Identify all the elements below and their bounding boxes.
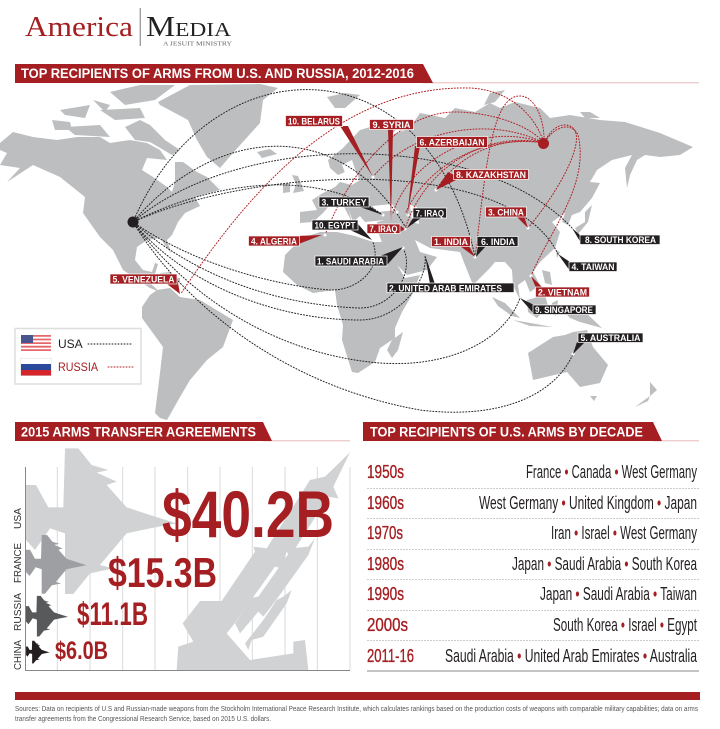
heading: top recipients map: TOP RECIPIENTS OF ARMS FROM U.S. AND RUSSIA, 2012-2016 bbox=[21, 66, 414, 81]
label: 10. Egypt bbox=[312, 220, 372, 240]
label: 2. United Arab Emirates bbox=[387, 255, 514, 294]
label: 6. Azerbaijan: 6. AZERBAIJAN bbox=[420, 138, 485, 148]
chart axis bbox=[26, 467, 350, 670]
heading: top recipients by decade bbox=[363, 422, 699, 441]
label: 6. India (USA): 6. INDIA bbox=[481, 237, 515, 248]
label: 7. Iraq (Russia): 7. IRAQ bbox=[370, 224, 398, 235]
label: 4. Algeria: 4. ALGERIA bbox=[251, 236, 297, 248]
sources text bbox=[15, 706, 698, 723]
origin dot: USA bbox=[128, 216, 138, 228]
row: 1990s: 1990s bbox=[367, 584, 404, 604]
label: 3. China bbox=[486, 207, 528, 228]
label: 3. Turkey: 3. TURKEY bbox=[322, 198, 367, 208]
jet: USA bbox=[26, 448, 177, 594]
label: 6. India (USA) bbox=[476, 236, 518, 257]
heading: top recipients map bbox=[15, 64, 699, 83]
chart: 2015 arms transfers bbox=[13, 448, 350, 670]
map: Indonesia bbox=[492, 295, 602, 328]
label: 1. India (Russia) bbox=[432, 236, 475, 257]
row: 1980s: 1980s bbox=[367, 554, 404, 574]
map: inland seas bbox=[342, 160, 419, 224]
label: 4. Taiwan: 4. TAIWAN bbox=[572, 262, 615, 273]
Russia arcs bbox=[180, 88, 580, 295]
world map bbox=[0, 84, 693, 420]
label: 7. Iraq (USA): 7. IRAQ bbox=[416, 208, 444, 220]
row: 1950s: 1950s bbox=[367, 462, 404, 482]
heading: 2015 arms transfer agreements bbox=[15, 422, 350, 441]
map: Eurasia bbox=[300, 102, 693, 300]
axis label: France: FRANCE bbox=[13, 543, 24, 583]
label: 4. Taiwan bbox=[558, 254, 617, 273]
map: Arctic and Pacific islands bbox=[327, 90, 600, 285]
heading: top recipients by decade: TOP RECIPIENTS OF U.S. ARMS BY DECADE bbox=[370, 424, 643, 440]
label: 5. Australia: 5. AUSTRALIA bbox=[580, 333, 641, 344]
row: 2000s bbox=[367, 615, 697, 635]
row: 2000s: 2000s bbox=[367, 615, 408, 635]
label: 5. Venezuela bbox=[110, 274, 180, 294]
axis label: Russia: RUSSIA bbox=[13, 593, 24, 631]
label: 1. Saudi Arabia: 1. SAUDI ARABIA bbox=[317, 256, 384, 268]
logo: America Media: A JESUIT MINISTRY bbox=[163, 40, 232, 48]
missile launcher silhouette bbox=[177, 452, 350, 670]
row: 2000s: South Korea • Israel • Egypt bbox=[553, 615, 697, 635]
label: 8. Kazakhstan: 8. KAZAKHSTAN bbox=[456, 170, 526, 181]
sources text: transfer agreements from the Congressional Research Service, based on 2015 U.S. dollars. bbox=[15, 716, 271, 723]
label: 5. Australia bbox=[573, 333, 643, 354]
label: 9. Syria bbox=[370, 120, 414, 222]
amount: Russia: $11.1B bbox=[77, 596, 148, 632]
label: 2. Vietnam bbox=[531, 276, 590, 298]
footer bar bbox=[15, 692, 700, 700]
icon: USA flag bbox=[21, 335, 51, 351]
table: recipients by decade bbox=[367, 462, 699, 671]
label: 5. Venezuela: 5. VENEZUELA bbox=[112, 274, 175, 286]
map: Canadian Arctic islands bbox=[52, 85, 180, 155]
legend text: Russia: RUSSIA bbox=[58, 362, 98, 374]
label: 2. United Arab Emirates: 2. UNITED ARAB EMIRATES bbox=[389, 284, 503, 294]
legend line: USA bbox=[88, 343, 133, 345]
destination dots bbox=[178, 176, 574, 356]
row: 1960s: West Germany • United Kingdom • Japan bbox=[479, 493, 697, 513]
chart gridlines bbox=[57, 467, 350, 670]
label: 8. Kazakhstan bbox=[436, 170, 528, 190]
label: 9. Syria: 9. SYRIA bbox=[372, 120, 411, 131]
row: 1960s bbox=[367, 493, 697, 513]
label: 4. Algeria bbox=[248, 235, 322, 248]
row: 1960s: 1960s bbox=[367, 493, 404, 513]
label: 1. India (Russia): 1. INDIA bbox=[434, 237, 468, 248]
legend bbox=[15, 328, 141, 384]
logo: America Media bbox=[25, 8, 232, 48]
USA arcs bbox=[133, 90, 573, 412]
legend text: USA: USA bbox=[58, 337, 83, 351]
heading: 2015 arms transfer agreements: 2015 ARMS TRANSFER AGREEMENTS bbox=[21, 424, 256, 440]
label: 10. Belarus bbox=[286, 116, 373, 177]
label: 1. Saudi Arabia bbox=[315, 247, 403, 268]
axis label: China: CHINA bbox=[13, 640, 24, 670]
label: 10. Egypt: 10. EGYPT bbox=[314, 220, 356, 232]
map: Africa bbox=[283, 232, 420, 373]
map: North America bbox=[0, 132, 220, 292]
label: 9. Singapore: 9. SINGAPORE bbox=[535, 305, 594, 316]
logo: America Media: MEDIA bbox=[146, 12, 232, 43]
row: 1990s: Japan • Saudi Arabia • Taiwan bbox=[540, 584, 697, 604]
amount: China: $6.0B bbox=[55, 637, 108, 665]
row: 2011-16: 2011-16 bbox=[367, 646, 414, 666]
map: Iceland, Britain, Ireland, Caribbean bbox=[160, 149, 304, 281]
row: 1990s bbox=[367, 584, 697, 604]
label: 7. Iraq (USA) bbox=[407, 208, 446, 228]
label: 8. South Korea bbox=[572, 228, 660, 246]
axis label: USA: USA bbox=[13, 508, 24, 529]
map: Australia bbox=[528, 330, 608, 387]
row: 1970s bbox=[367, 523, 697, 543]
label: 8. South Korea: 8. SOUTH KOREA bbox=[585, 235, 656, 246]
amount: France: $15.3B bbox=[108, 549, 217, 596]
row: 2011-16: Saudi Arabia • United Arab Emirates • Australia bbox=[445, 646, 698, 666]
map: Greenland bbox=[158, 84, 278, 168]
legend line: Russia bbox=[108, 366, 133, 368]
map: Tasmania, New Zealand, Madagascar, Sri Lanka bbox=[387, 283, 657, 407]
row: 1950s bbox=[367, 462, 697, 482]
jet: China bbox=[26, 641, 50, 663]
row bottom rule bbox=[367, 670, 699, 672]
jet: France bbox=[26, 535, 87, 594]
row: 1970s: 1970s bbox=[367, 523, 403, 543]
amount: USA: $40.2B bbox=[162, 477, 334, 551]
jet: Russia bbox=[26, 596, 68, 637]
origin dot: Russia bbox=[538, 138, 549, 149]
label: 3. China: 3. CHINA bbox=[488, 208, 524, 218]
row dividers bbox=[367, 488, 699, 640]
map: South America bbox=[142, 288, 233, 420]
label: 9. Singapore bbox=[520, 298, 596, 316]
logo: America Media: America bbox=[25, 11, 133, 43]
label: 3. Turkey bbox=[319, 197, 383, 215]
icon: Russia flag bbox=[20, 358, 52, 376]
label: 10. Belarus: 10. BELARUS bbox=[288, 116, 340, 128]
row: 1980s bbox=[367, 554, 698, 574]
label: 6. Azerbaijan bbox=[407, 136, 488, 217]
label: 2. Vietnam: 2. VIETNAM bbox=[538, 288, 587, 298]
